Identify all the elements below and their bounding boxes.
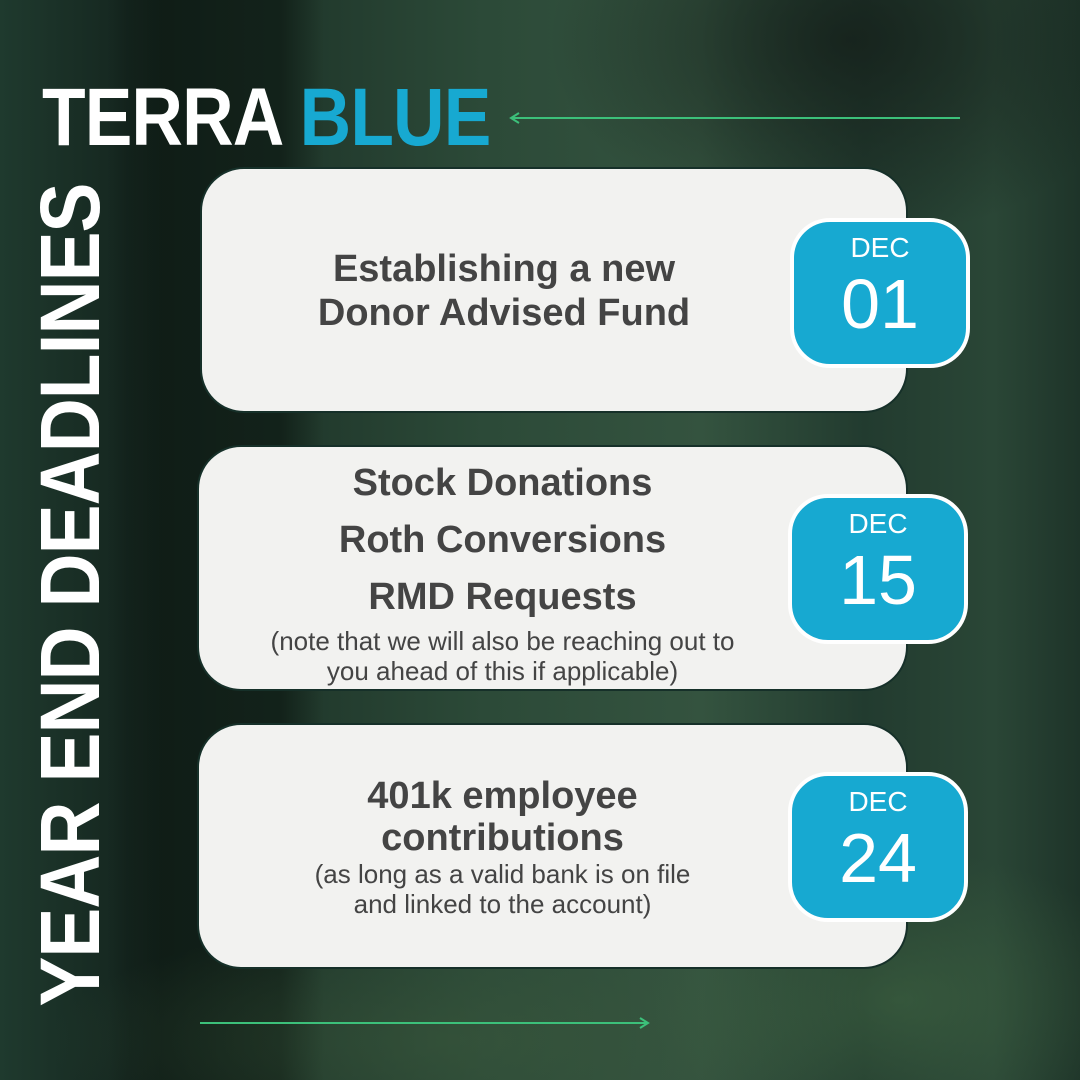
panel: card 1 [200,167,908,413]
panel: card 2 [197,445,908,691]
badge: DEC 24: 24 [839,819,917,897]
text: card 3: contributions [381,817,624,859]
badge: DEC 15: 15 [839,541,917,619]
title: TERRA BLUE [42,72,490,163]
arrow: bottom line [200,1017,650,1029]
text: card 2: you ahead of this if applicable) [327,656,678,686]
badge: DEC 15 [788,494,968,644]
badge: DEC 01 [790,218,970,368]
text: card 3: and linked to the account) [354,889,651,919]
text: card 3 [315,775,690,919]
text: card 2 [271,462,734,686]
text: card 2: (note that we will also be reaching out to [271,626,734,656]
vertical heading: YEAR END DEADLINES [23,183,117,1007]
text: card 2: Roth Conversions [339,519,666,561]
text: card 3: (as long as a valid bank is on file [315,859,690,889]
badge: DEC 24: DEC [848,786,908,817]
badge: DEC 01: 01 [841,265,919,343]
text: card 2: Stock Donations [353,462,652,504]
text: card 3: 401k employee [367,775,638,817]
badge: DEC 15: DEC [848,508,908,539]
arrow: top line [509,112,960,124]
text: card 1: Establishing a new [333,248,675,290]
text: card 1: Donor Advised Fund [318,292,690,334]
panel: card 3 [197,723,908,969]
badge: DEC 24 [788,772,968,922]
text: card 1 [318,248,690,334]
badge: DEC 01: DEC [850,232,910,263]
text: card 2: RMD Requests [368,576,637,618]
